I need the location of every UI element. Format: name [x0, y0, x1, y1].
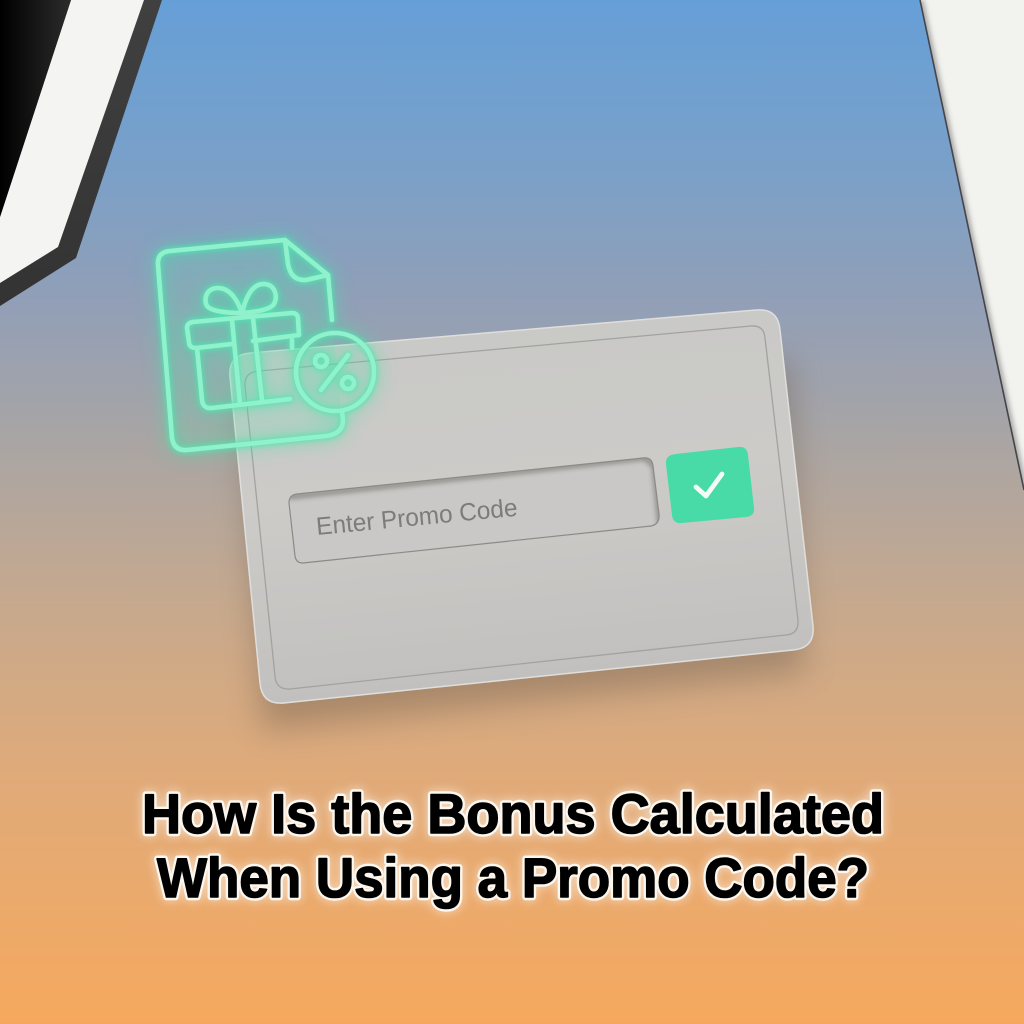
softbox light: top left [0, 0, 162, 306]
softbox light: right side [920, 0, 1024, 490]
title line 2: When Using a Promo Code? [157, 846, 869, 909]
promo code card [230, 310, 813, 703]
title line 1: How Is the Bonus Calculated [142, 782, 884, 845]
check mark [696, 474, 722, 496]
card inner border [245, 326, 798, 689]
title: How Is the Bonus Calculated [142, 782, 884, 845]
neon icon: document with gift and percent badge [158, 240, 374, 451]
title: When Using a Promo Code? [157, 846, 869, 909]
green confirm button [666, 447, 754, 523]
title: When Using a Promo Code? [157, 846, 869, 909]
placeholder text: Enter Promo Code [315, 494, 519, 541]
title: How Is the Bonus Calculated [142, 782, 884, 845]
title [142, 782, 884, 909]
card drop shadow [240, 360, 805, 730]
promo code input field [289, 458, 660, 563]
